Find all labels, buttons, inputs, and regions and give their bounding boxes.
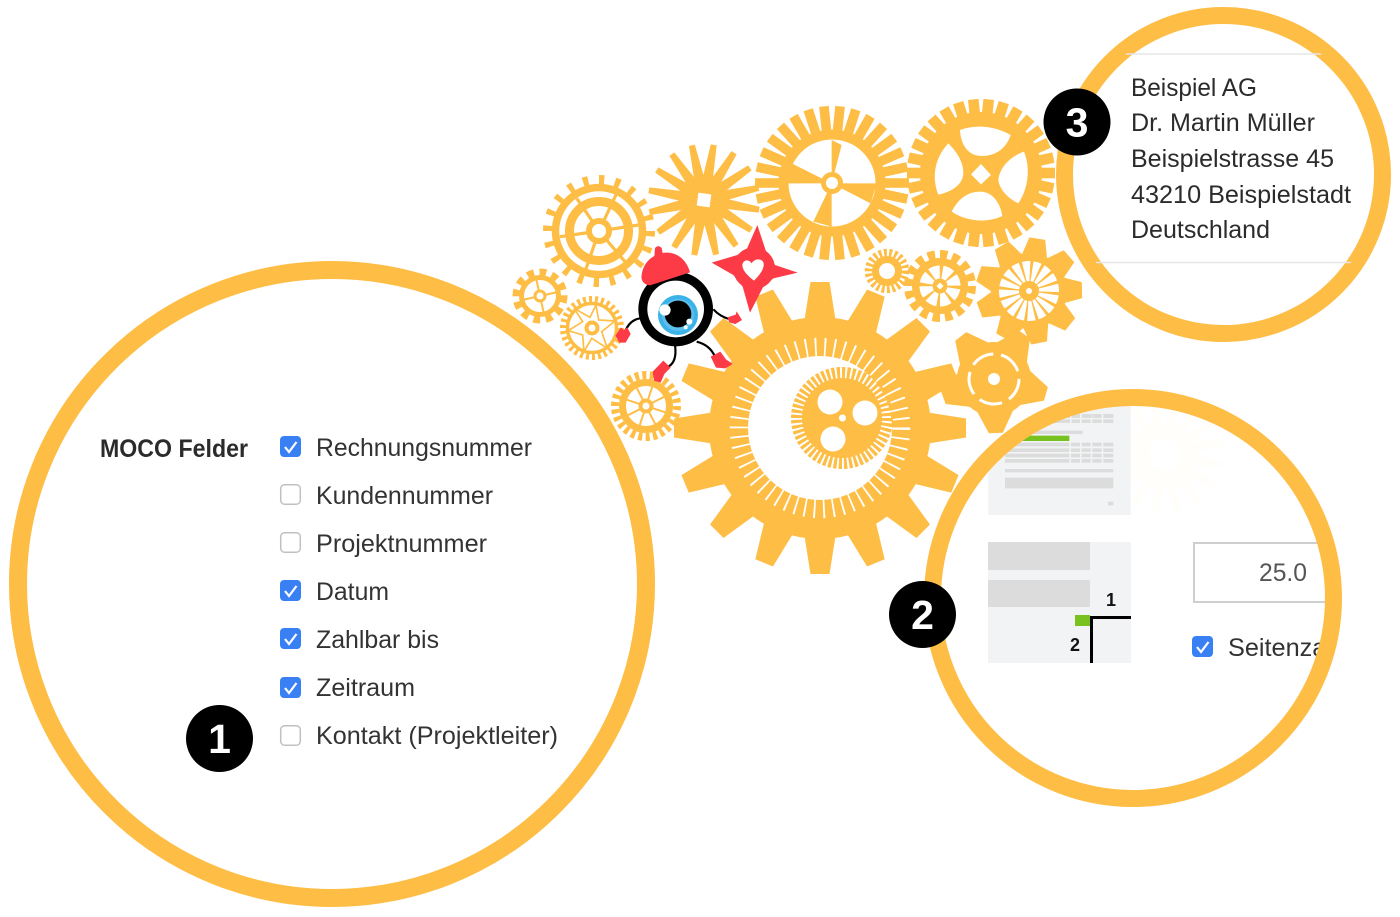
position thumbnail bottom: 1 [1106, 590, 1116, 610]
invoice thumbnail top [988, 400, 1131, 515]
gear: double ring wheel [548, 180, 650, 282]
gear: spoked wheel [615, 375, 677, 437]
field: Zahlbar bis checked: Zahlbar bis [316, 626, 439, 654]
input field 25.0 [1193, 542, 1325, 603]
position thumbnail bottom [988, 542, 1131, 663]
position thumbnail bottom: 2 [1070, 635, 1080, 655]
field: Datum checked: Datum [316, 578, 389, 606]
address text: Beispiel AG [1131, 74, 1257, 102]
badge: number 3: 3 [1066, 100, 1088, 146]
field: Datum checked [280, 578, 389, 606]
checkbox Seitenzahl [1192, 636, 1320, 657]
icon: red star with heart [712, 225, 798, 313]
main gear [674, 282, 966, 574]
address text: Dr. Martin Müller [1131, 109, 1315, 137]
gear: star wheel [563, 299, 621, 357]
icon: eye mascot [615, 246, 742, 383]
badge: number 1: 1 [208, 716, 231, 762]
input field 25.0: 25.0 [1259, 559, 1307, 587]
gear: small left wheel [516, 272, 564, 320]
address text [1131, 74, 1351, 244]
gear: four window wheel [907, 99, 1055, 247]
panel: circle 2 layout settings [932, 396, 1354, 798]
gear: sunburst [648, 144, 760, 256]
field: Kontakt unchecked: Kontakt (Projektleiter) [316, 722, 558, 750]
address text: 43210 Beispielstadt [1131, 181, 1351, 209]
field: Rechnungsnummer checked: Rechnungsnummer [316, 434, 532, 462]
gear: wedge wheel [755, 106, 909, 260]
gear: nine tooth wheel [975, 237, 1082, 346]
address text: Deutschland [1131, 216, 1270, 244]
panel: circle 3 address [1050, 16, 1390, 334]
field: Kundennummer unchecked: Kundennummer [316, 482, 493, 510]
badge: number 1 [186, 705, 253, 772]
panel: circle 1 MOCO Felder [18, 270, 646, 898]
field: Projektnummer unchecked: Projektnummer [316, 530, 487, 558]
badge: number 2: 2 [911, 592, 934, 638]
gear: petal wheel [908, 254, 972, 318]
address text: Beispielstrasse 45 [1131, 145, 1334, 173]
gear: tiny wheel [868, 252, 906, 290]
field: Zeitraum checked: Zeitraum [316, 674, 415, 702]
badge: number 2 [889, 581, 956, 648]
checkbox Seitenzahl: Seitenzahl [1228, 634, 1346, 662]
faint background gear [1106, 396, 1224, 514]
heading: MOCO Felder: MOCO Felder [100, 435, 248, 463]
badge: number 3 [1044, 88, 1110, 156]
gear: five tooth wheel [937, 324, 1051, 434]
